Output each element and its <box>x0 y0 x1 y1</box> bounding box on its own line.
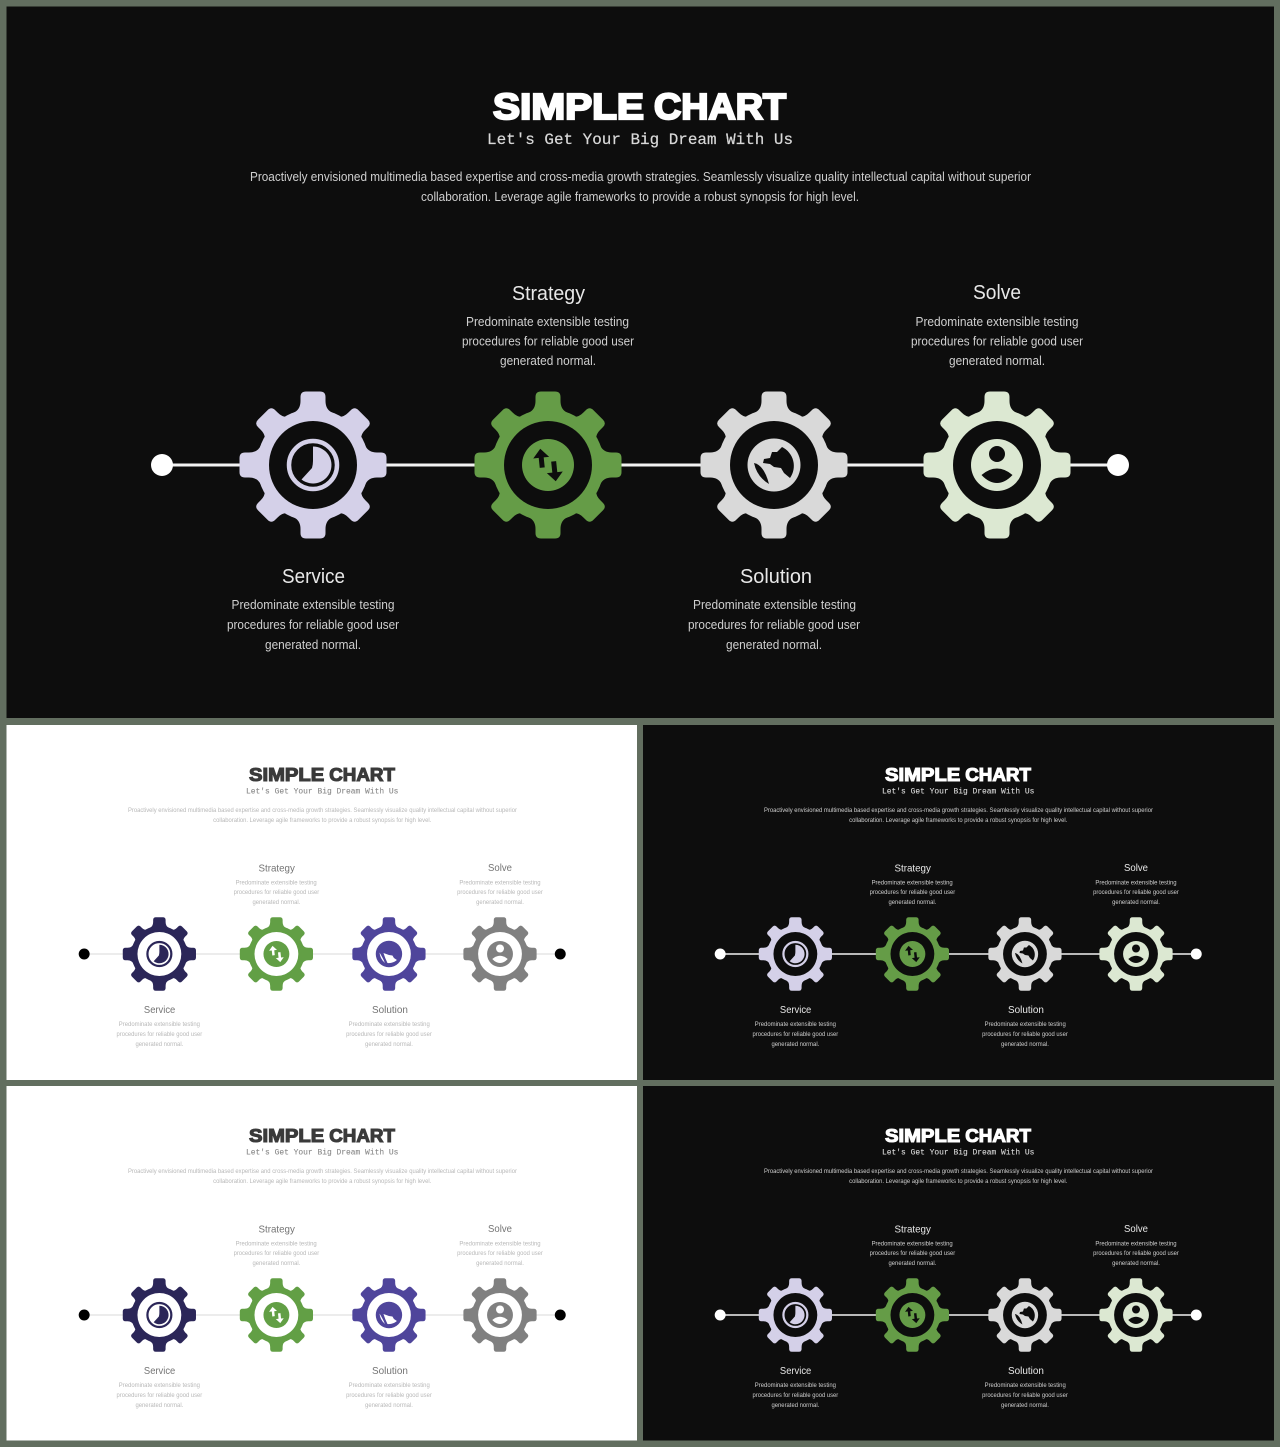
text block: service: Predominate extensible testing <box>232 598 395 612</box>
text block: service <box>117 1366 202 1409</box>
panel background <box>6 1086 637 1440</box>
intro paragraph <box>128 807 517 824</box>
title: SIMPLE <box>249 765 324 785</box>
subtitle: Let's Get Your Big Dream With Us <box>882 1148 1035 1158</box>
text block: solution: Predominate extensible testing <box>693 598 856 612</box>
text block: solution <box>346 1366 432 1409</box>
title: CHART <box>965 765 1031 785</box>
panel: small dark slide bottom <box>643 1086 1274 1440</box>
text block: service: procedures for reliable good user <box>753 1031 838 1038</box>
text block: solution: procedures for reliable good user <box>688 618 860 632</box>
subtitle: Let's Get Your Big Dream With Us <box>882 787 1035 797</box>
intro paragraph: Proactively envisioned multimedia based expertise and cross-media growth strategies. Seamlessly visualize quality intellectual capital without superior <box>250 170 1031 184</box>
text block: service: generated normal. <box>135 1402 184 1409</box>
text block: solution: generated normal. <box>726 638 822 652</box>
title <box>249 765 395 785</box>
text block: strategy: Strategy <box>258 863 295 875</box>
slide contents <box>79 765 566 1048</box>
text block: strategy: procedures for reliable good user <box>870 1250 955 1257</box>
text block: strategy: generated normal. <box>500 354 596 368</box>
text block: service <box>227 566 399 652</box>
subtitle: Let's Get Your Big Dream With Us <box>246 787 399 797</box>
text block: strategy: Strategy <box>512 283 585 305</box>
text block: strategy <box>870 863 955 906</box>
start dot <box>79 948 90 960</box>
text block: solution: generated normal. <box>365 1041 413 1048</box>
text block: service: procedures for reliable good user <box>227 618 399 632</box>
text block: solution: procedures for reliable good user <box>982 1392 1068 1399</box>
text block: service <box>753 1005 838 1048</box>
text block: solution: Predominate extensible testing <box>349 1382 430 1389</box>
text block: service: Predominate extensible testing <box>119 1382 200 1389</box>
intro paragraph <box>128 1168 517 1185</box>
gear: solution globe <box>352 917 426 991</box>
title <box>249 1126 395 1146</box>
text block: solve <box>1093 1224 1179 1267</box>
text block: solution: Predominate extensible testing <box>985 1382 1066 1389</box>
gear: strategy arrows <box>240 1278 313 1352</box>
text block: service: Service <box>780 1366 812 1377</box>
text block: solution: generated normal. <box>1001 1041 1049 1048</box>
gear: solve person <box>1099 917 1173 991</box>
text block: solution: Predominate extensible testing <box>349 1021 430 1028</box>
slide contents <box>715 765 1202 1048</box>
title: CHART <box>329 765 395 785</box>
text block: strategy <box>234 863 319 906</box>
text block: service: generated normal. <box>135 1041 184 1048</box>
intro paragraph <box>764 807 1153 824</box>
text block: solve: Solve <box>1124 863 1148 874</box>
text block: solve: Solve <box>488 1224 512 1235</box>
end dot <box>555 948 566 960</box>
timeline line <box>84 1314 560 1316</box>
panel background <box>643 725 1274 1080</box>
text block: service: Service <box>780 1005 812 1016</box>
end dot <box>1191 1310 1202 1320</box>
intro paragraph: Proactively envisioned multimedia based expertise and cross-media growth strategies. Seamlessly visualize quality intellectual capital without superior <box>128 1168 517 1175</box>
text block: solve: Predominate extensible testing <box>459 1240 541 1248</box>
intro paragraph: Proactively envisioned multimedia based expertise and cross-media growth strategies. Seamlessly visualize quality intellectual capital without superior <box>128 807 517 814</box>
text block: solution: procedures for reliable good user <box>346 1392 432 1399</box>
text block: solution: Solution <box>372 1005 408 1016</box>
text block: service: procedures for reliable good user <box>753 1392 838 1399</box>
text block: service: generated normal. <box>771 1041 820 1048</box>
text block: solve: Solve <box>973 282 1021 304</box>
text block: solve <box>911 282 1083 368</box>
text block: strategy: procedures for reliable good user <box>234 889 319 896</box>
text block: solution: procedures for reliable good user <box>982 1031 1068 1038</box>
text block: solution: Solution <box>372 1366 408 1377</box>
gear: solution globe <box>700 392 848 538</box>
timeline line <box>720 952 1196 956</box>
text block: strategy: Predominate extensible testing <box>872 879 953 887</box>
gear: solution globe <box>988 917 1062 991</box>
intro paragraph: collaboration. Leverage agile frameworks to provide a robust synopsis for high level. <box>849 1178 1068 1185</box>
title: SIMPLE <box>493 86 644 127</box>
text block: solution <box>982 1366 1068 1409</box>
text block: solve <box>457 1224 543 1267</box>
text block: strategy: Predominate extensible testing <box>236 1240 317 1248</box>
text block: strategy: procedures for reliable good user <box>234 1250 319 1257</box>
text block: solution: generated normal. <box>1001 1402 1049 1409</box>
text block: solution <box>688 566 860 652</box>
text block: strategy: Strategy <box>894 863 931 875</box>
text block: service: procedures for reliable good user <box>117 1392 202 1399</box>
text block: service: Predominate extensible testing <box>119 1021 200 1028</box>
text block: solve: procedures for reliable good user <box>911 334 1083 348</box>
text block: solution: Solution <box>1008 1366 1044 1377</box>
title <box>493 86 786 127</box>
text block: strategy: generated normal. <box>252 899 301 906</box>
text block: strategy: Predominate extensible testing <box>466 315 629 329</box>
end dot <box>555 1310 566 1320</box>
gear: solution globe <box>352 1278 426 1352</box>
title: SIMPLE <box>885 1126 960 1146</box>
text block: service: Service <box>282 566 345 588</box>
text block: solution: generated normal. <box>365 1402 413 1409</box>
gear: solve person <box>463 917 537 991</box>
timeline line <box>84 952 560 956</box>
gear: strategy arrows <box>240 917 313 991</box>
panel background <box>6 6 1274 718</box>
start dot <box>715 1310 726 1320</box>
text block: strategy: Predominate extensible testing <box>236 879 317 887</box>
text block: solve: generated normal. <box>1112 899 1160 906</box>
start dot <box>151 454 173 476</box>
panel: small dark slide top <box>643 725 1274 1080</box>
text block: solve: procedures for reliable good user <box>457 1250 543 1257</box>
end dot <box>1107 454 1129 476</box>
panel: small light slide top <box>6 725 637 1080</box>
text block: solution: Solution <box>1008 1005 1044 1016</box>
panel background <box>6 725 637 1080</box>
intro paragraph: Proactively envisioned multimedia based expertise and cross-media growth strategies. Seamlessly visualize quality intellectual capital without superior <box>764 1168 1153 1175</box>
start dot <box>79 1310 90 1320</box>
title: CHART <box>654 86 786 127</box>
text block: service: procedures for reliable good user <box>117 1031 202 1038</box>
text block: solve: Predominate extensible testing <box>1095 879 1177 887</box>
text block: strategy <box>870 1224 955 1267</box>
intro paragraph: collaboration. Leverage agile frameworks to provide a robust synopsis for high level. <box>213 817 432 824</box>
start dot <box>715 948 726 960</box>
text block: strategy: Predominate extensible testing <box>872 1240 953 1248</box>
title: CHART <box>329 1126 395 1146</box>
text block: service: Service <box>144 1005 176 1016</box>
text block: service: Service <box>144 1366 176 1377</box>
text block: service: generated normal. <box>771 1402 820 1409</box>
panel: small light slide bottom <box>6 1086 637 1440</box>
text block: solve: generated normal. <box>949 354 1045 368</box>
intro paragraph: collaboration. Leverage agile frameworks to provide a robust synopsis for high level. <box>213 1178 432 1185</box>
text block: service: Predominate extensible testing <box>755 1021 836 1028</box>
slide contents <box>715 1126 1202 1409</box>
gear: solve person <box>924 392 1070 538</box>
slide contents <box>79 1126 566 1409</box>
gear: service clock <box>123 917 196 991</box>
title: CHART <box>965 1126 1031 1146</box>
text block: strategy: generated normal. <box>888 1260 937 1267</box>
text block: service <box>753 1366 838 1409</box>
title <box>885 1126 1031 1146</box>
gear: solve person <box>1099 1278 1173 1352</box>
text block: solve: Predominate extensible testing <box>1095 1240 1177 1248</box>
text block: solve: Predominate extensible testing <box>916 315 1079 329</box>
slide contents <box>151 86 1129 652</box>
intro paragraph <box>250 170 1031 204</box>
intro paragraph <box>764 1168 1153 1185</box>
text block: strategy: procedures for reliable good user <box>462 334 634 348</box>
timeline line <box>720 1314 1196 1316</box>
text block: solve: Solve <box>488 863 512 874</box>
gear: solution globe <box>988 1278 1062 1352</box>
text block: solve: generated normal. <box>476 1260 524 1267</box>
text block: strategy <box>234 1224 319 1267</box>
text block: solve: procedures for reliable good user <box>457 889 543 896</box>
text block: solve: generated normal. <box>1112 1260 1160 1267</box>
title: SIMPLE <box>249 1126 324 1146</box>
panel background <box>643 1086 1274 1440</box>
intro paragraph: collaboration. Leverage agile frameworks to provide a robust synopsis for high level. <box>849 817 1068 824</box>
subtitle: Let's Get Your Big Dream With Us <box>246 1148 399 1158</box>
title <box>885 765 1031 785</box>
gear: service clock <box>240 392 386 538</box>
text block: solution: procedures for reliable good user <box>346 1031 432 1038</box>
text block: solve: procedures for reliable good user <box>1093 1250 1179 1257</box>
gear: strategy arrows <box>876 1278 949 1352</box>
text block: service: generated normal. <box>265 638 361 652</box>
gear: service clock <box>759 917 832 991</box>
text block: strategy: generated normal. <box>888 899 937 906</box>
gear: strategy arrows <box>474 392 622 538</box>
timeline line <box>162 464 1118 466</box>
intro paragraph: Proactively envisioned multimedia based expertise and cross-media growth strategies. Seamlessly visualize quality intellectual capital without superior <box>764 807 1153 814</box>
text block: strategy: Strategy <box>258 1224 295 1236</box>
text block: solve: generated normal. <box>476 899 524 906</box>
text block: solution <box>346 1005 432 1048</box>
text block: service <box>117 1005 202 1048</box>
text block: solve <box>457 863 543 906</box>
text block: strategy: generated normal. <box>252 1260 301 1267</box>
text block: solution: Predominate extensible testing <box>985 1021 1066 1028</box>
gear: strategy arrows <box>876 917 949 991</box>
title: SIMPLE <box>885 765 960 785</box>
text block: solve: Predominate extensible testing <box>459 879 541 887</box>
gear: service clock <box>759 1278 832 1352</box>
gear: solve person <box>463 1278 537 1352</box>
panel: large dark slide <box>6 6 1274 718</box>
text block: strategy: procedures for reliable good user <box>870 889 955 896</box>
text block: solve: procedures for reliable good user <box>1093 889 1179 896</box>
text block: solution <box>982 1005 1068 1048</box>
gear: service clock <box>123 1278 196 1352</box>
text block: solve <box>1093 863 1179 906</box>
intro paragraph: collaboration. Leverage agile frameworks to provide a robust synopsis for high level. <box>421 190 859 204</box>
text block: strategy <box>462 283 634 368</box>
end dot <box>1191 948 1202 960</box>
subtitle: Let's Get Your Big Dream With Us <box>487 131 793 149</box>
text block: service: Predominate extensible testing <box>755 1382 836 1389</box>
text block: solution: Solution <box>740 566 812 588</box>
text block: strategy: Strategy <box>894 1224 931 1236</box>
text block: solve: Solve <box>1124 1224 1148 1235</box>
